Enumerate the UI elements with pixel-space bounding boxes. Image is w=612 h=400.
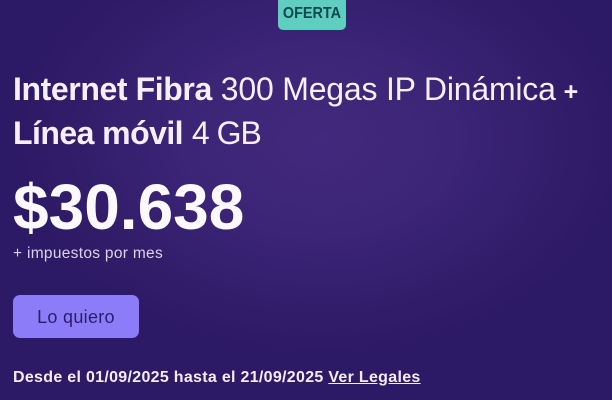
price: $30.638 <box>13 171 244 243</box>
validity dates and legal link: Desde el 01/09/2025 hasta el 21/09/2025 Ver Legales <box>13 369 421 386</box>
button: lo quiero: Lo quiero <box>37 307 115 327</box>
badge: oferta: OFERTA <box>283 5 341 22</box>
heading: plan name: Internet Fibra 300 Megas IP Dinámica + <box>13 71 578 107</box>
heading: plan name <box>13 71 578 151</box>
heading: plan name: Línea móvil 4 GB <box>13 115 261 151</box>
badge: oferta <box>278 0 346 30</box>
button: lo quiero <box>13 295 139 338</box>
price note: + impuestos por mes <box>13 245 163 262</box>
